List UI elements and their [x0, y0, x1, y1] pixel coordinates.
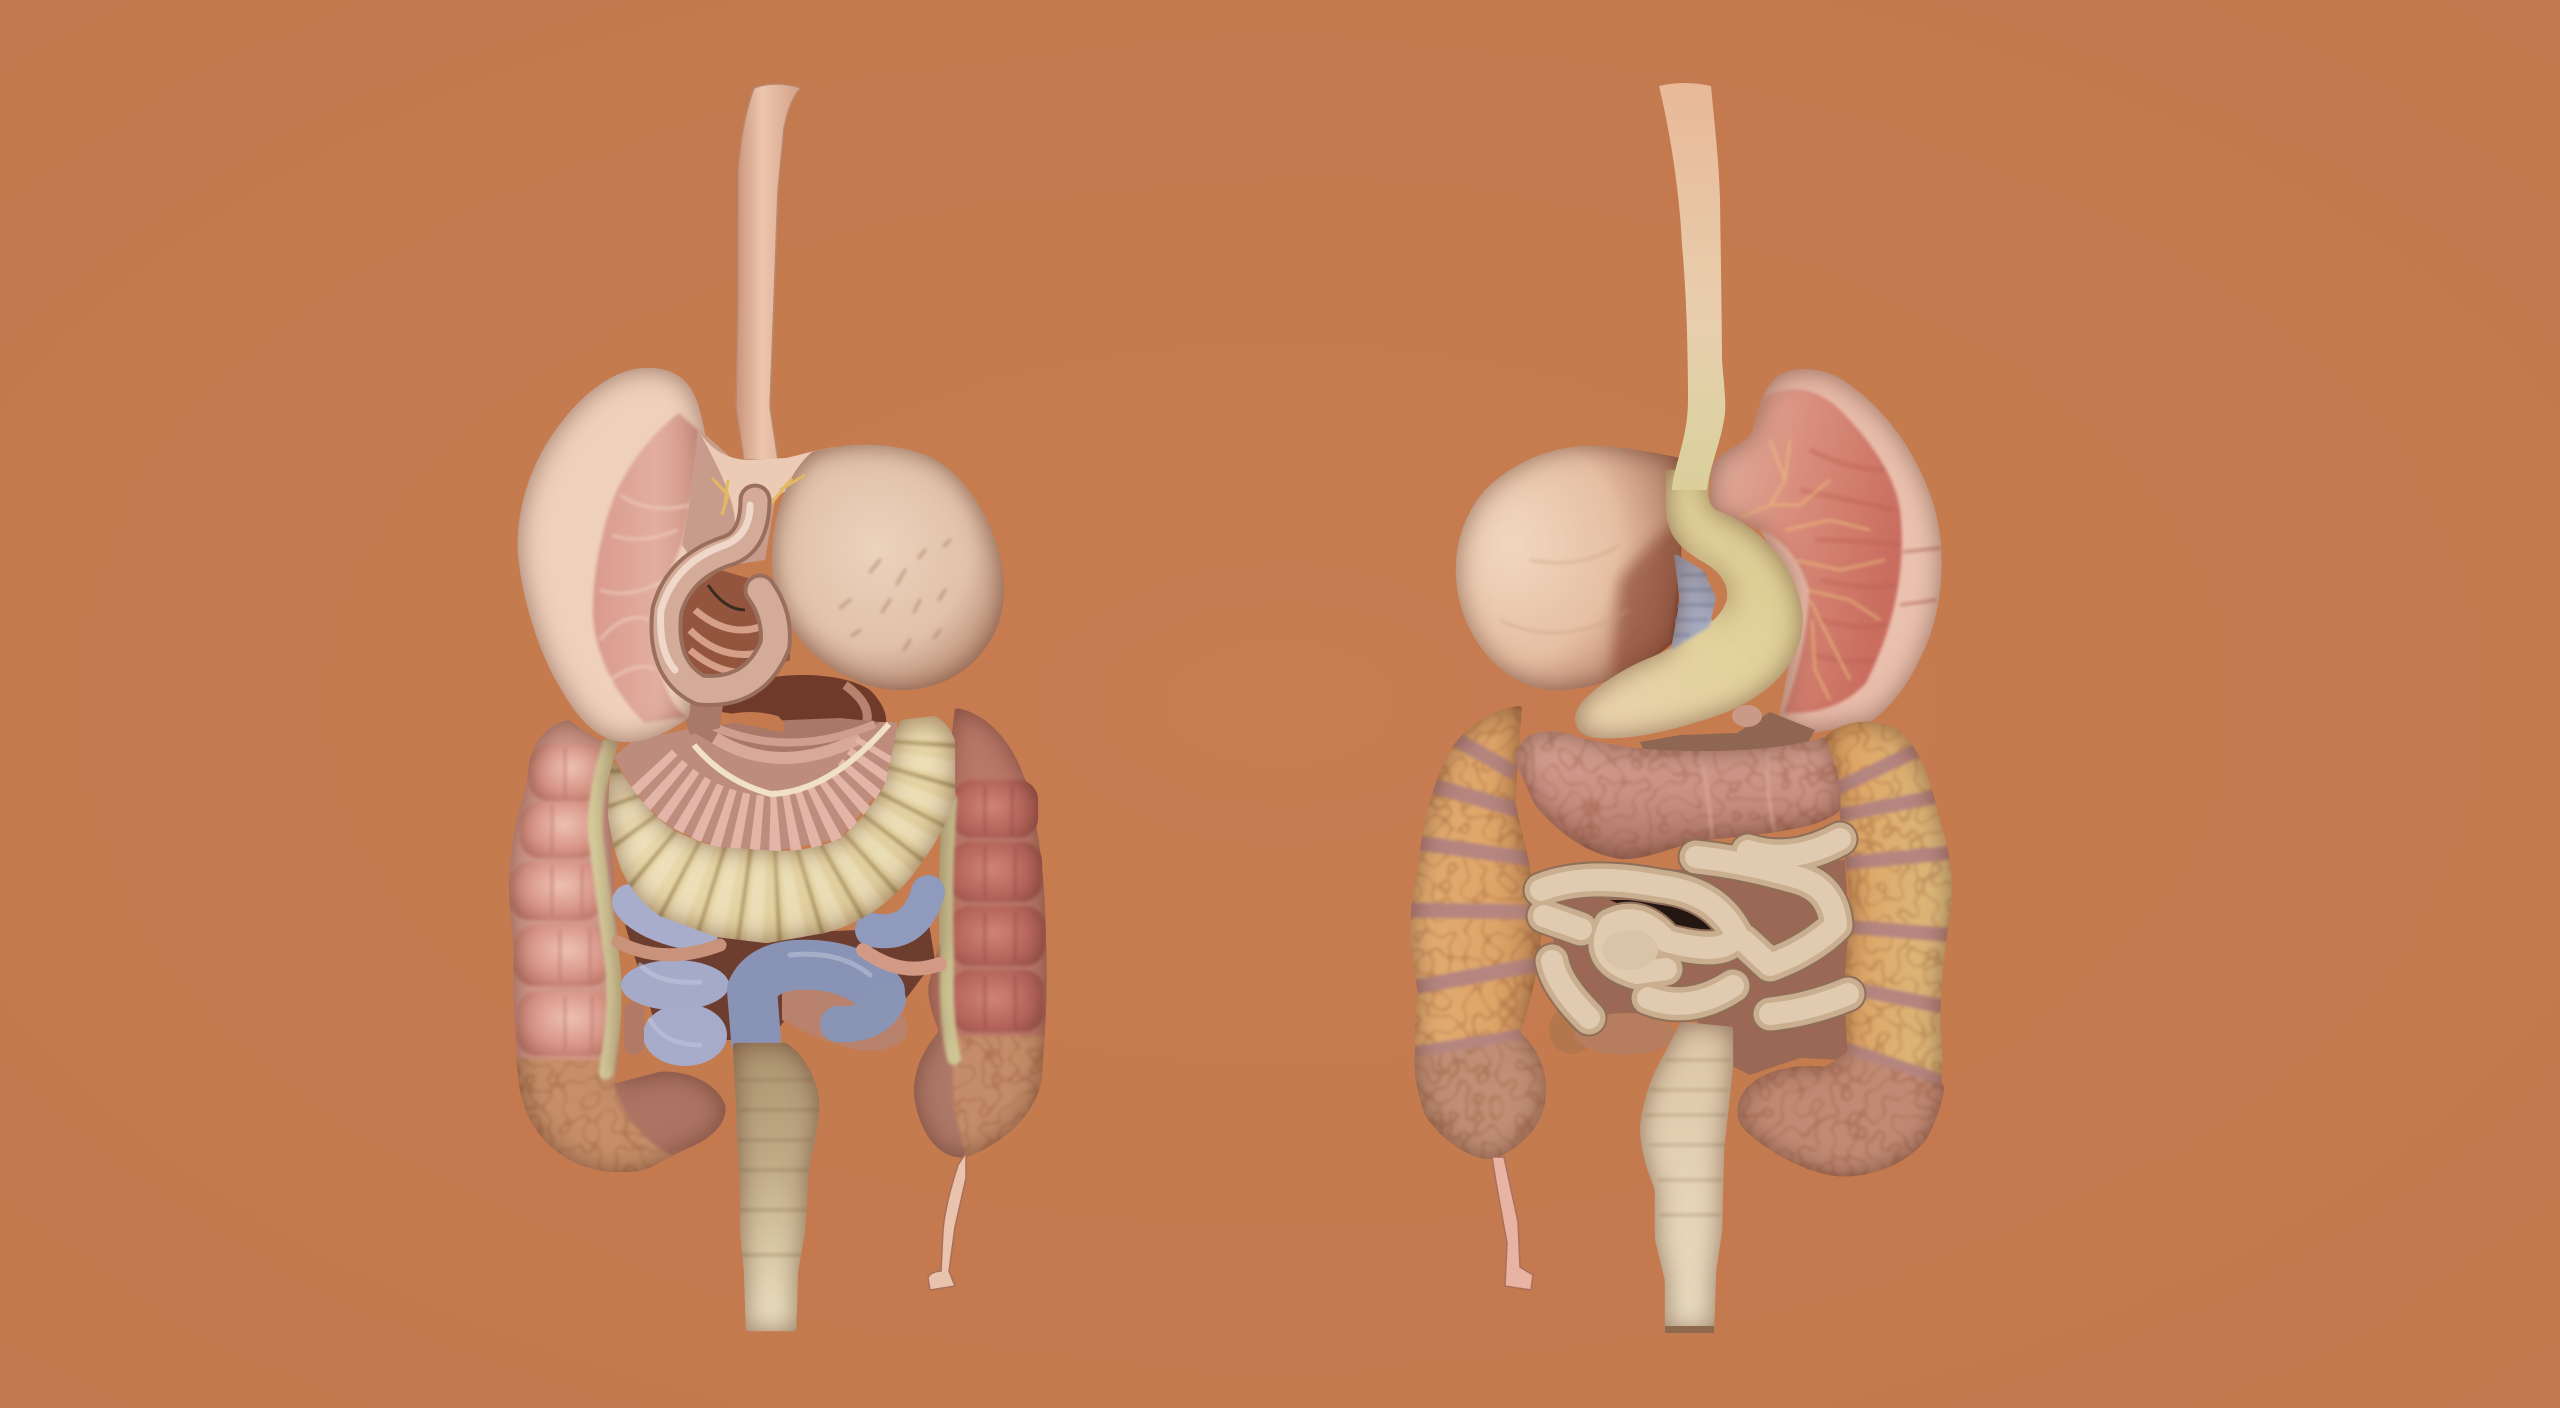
- connective tissue under tube: [1640, 712, 1815, 765]
- haustra, left column: [510, 745, 613, 1056]
- haustra, right column: [950, 780, 1045, 1032]
- transverse colon, cream band: [608, 716, 956, 943]
- lower pouches behind loops: [1549, 1006, 1675, 1055]
- pink tube in the dark tissue: [795, 685, 867, 752]
- stomach lobe, front: [518, 368, 709, 742]
- small nodule: [1732, 705, 1762, 727]
- connective tissue, lower right: [1550, 860, 1855, 1075]
- transverse colon, back: [1515, 731, 1840, 859]
- pouch: [614, 1072, 725, 1155]
- esophagus, back: [1659, 83, 1725, 490]
- ball of stomach, back: [1456, 446, 1682, 690]
- ball of stomach, front: [772, 445, 1004, 690]
- white arc: [694, 724, 889, 794]
- notch of background below the stomach: [722, 712, 784, 732]
- figure: front view: [509, 84, 1047, 1331]
- olive strip: [595, 745, 614, 1072]
- mesentery and tubes: [614, 718, 897, 851]
- yellow pyloric tube: [1575, 470, 1803, 738]
- side pouch: [914, 1031, 966, 1157]
- blue intestinal loops: [618, 892, 940, 1066]
- rectum, front: [733, 1043, 819, 1331]
- dark mass behind loops: [625, 900, 935, 1040]
- descending colon, dark red: [914, 708, 1047, 1157]
- dark gaps between small intestine loops: [1610, 900, 1745, 935]
- appendix, front: [928, 1153, 966, 1290]
- mauve bands, left colon: [1410, 734, 1536, 1055]
- cecum: [516, 1058, 671, 1172]
- mesentery ribs: [650, 752, 884, 826]
- lower left blue lobe: [643, 1004, 727, 1066]
- pouch, left colon: [1415, 1033, 1546, 1159]
- small intestine loops, back: [1541, 839, 1848, 1018]
- lump filling the center of the loops: [1602, 930, 1658, 970]
- red folds: [1800, 450, 1900, 662]
- pale seam marks: [1900, 548, 1940, 605]
- rectum end cap: [1665, 1326, 1714, 1333]
- rectum, back: [1640, 1022, 1733, 1331]
- pouch, right colon: [1738, 1052, 1944, 1176]
- ascending colon, pink: [509, 720, 725, 1172]
- figure: back view: [1400, 83, 1960, 1333]
- sigmoid end: [953, 1036, 1044, 1157]
- pink tissue beneath center loop: [782, 983, 908, 1051]
- stalk below the lobe: [680, 700, 722, 735]
- left colon, gold: [1400, 706, 1546, 1159]
- yellow veins: [1740, 440, 1885, 700]
- yellow vessels: [712, 475, 805, 515]
- red inner wall with folds: [1709, 389, 1902, 713]
- illustration: digestive system front and back: [508, 83, 1952, 1333]
- mauve bands, right colon: [1838, 744, 1950, 1084]
- duodenum loop: [661, 500, 775, 690]
- dark tissue under the ball: [722, 675, 886, 760]
- appendix, back: [1492, 1157, 1533, 1290]
- neck between lobe and ball: [700, 433, 835, 530]
- right colon, gold: [1738, 722, 1960, 1176]
- pink inner wall: [593, 413, 698, 723]
- cavity behind duodenum: [680, 430, 790, 690]
- stomach lobe, back: [1709, 369, 1942, 733]
- esophagus, front: [736, 84, 801, 460]
- blue patch: [1671, 553, 1716, 650]
- olive strip right: [946, 800, 954, 1058]
- middle left blue lobe: [621, 960, 729, 1010]
